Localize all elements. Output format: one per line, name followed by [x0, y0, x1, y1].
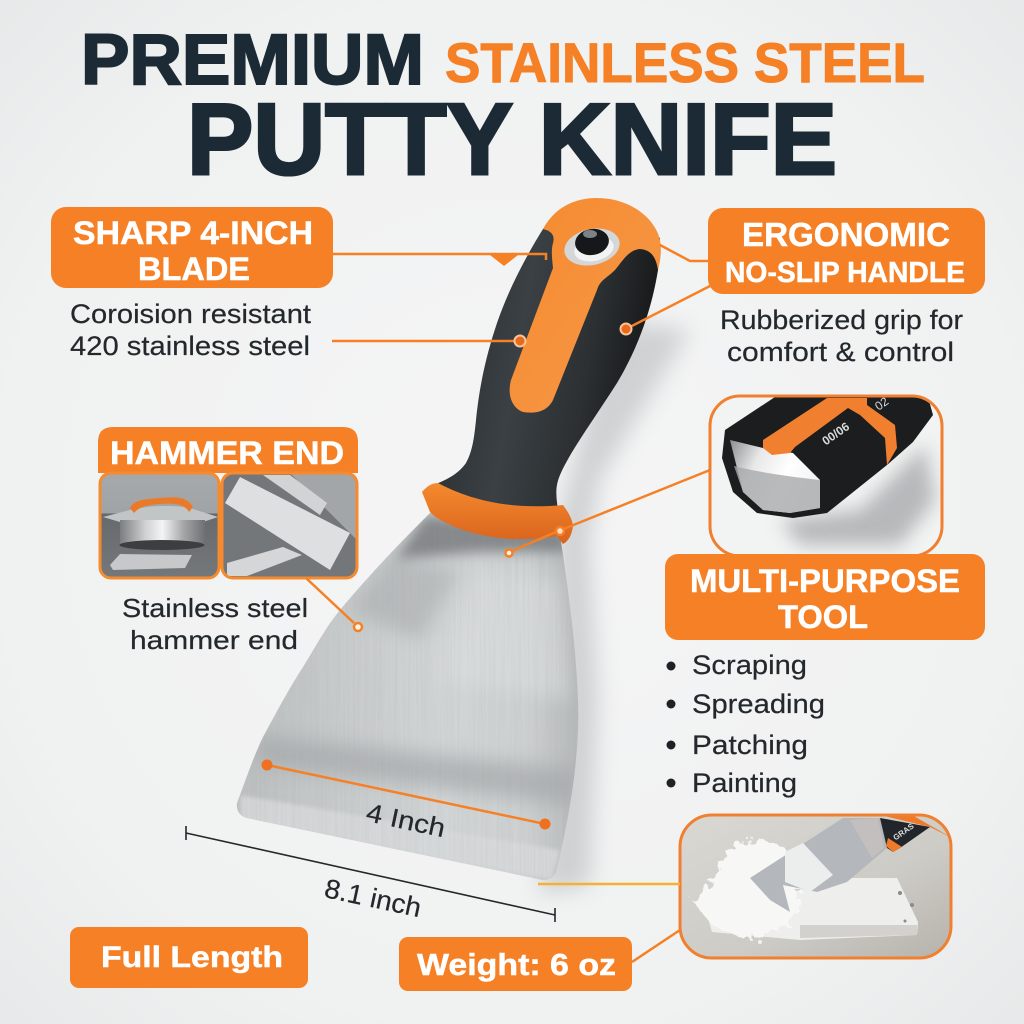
- photo: spreading plaster: GRAS: [892, 821, 916, 842]
- text: blade material: [70, 299, 312, 361]
- callout: sharp blade: [51, 207, 333, 288]
- photo: hammer end plates: [222, 473, 357, 578]
- heading: hammer end: [98, 427, 358, 473]
- callout: multi-purpose tool: [665, 554, 985, 640]
- title: PREMIUM: [81, 21, 424, 100]
- text: blade material: 420 stainless steel: [70, 331, 310, 361]
- photo: hammer end close-up: 00/06: [819, 419, 852, 448]
- handle orange grip: [510, 198, 661, 413]
- photo: spreading plaster: [680, 815, 952, 958]
- badge: full length: [70, 927, 308, 988]
- text: hammer end description: hammer end: [130, 625, 298, 655]
- heading: hammer end: HAMMER END: [110, 435, 344, 471]
- list: uses: [666, 650, 825, 798]
- text: hammer end description: [122, 593, 308, 655]
- panel: hammer end: [98, 427, 358, 578]
- knife shadow: [540, 320, 690, 895]
- connectors: handle callout: [620, 245, 710, 334]
- connectors: collar to close-up: [506, 470, 710, 556]
- callout: sharp blade: SHARP 4-INCH: [73, 215, 313, 251]
- callout: ergonomic handle: [708, 208, 985, 294]
- list: uses: Painting: [692, 768, 797, 798]
- callout: sharp blade: BLADE: [138, 251, 250, 287]
- badge: weight: [399, 937, 632, 991]
- callout: ergonomic handle: ERGONOMIC: [742, 216, 950, 253]
- putty knife illustration: [230, 198, 690, 895]
- blade: [230, 505, 585, 890]
- text: handle description: comfort & control: [727, 337, 954, 367]
- collar: [422, 483, 573, 544]
- text: handle description: Rubberized grip for: [720, 305, 963, 335]
- list: uses: Spreading: [692, 689, 825, 719]
- dimension: blade width: [262, 760, 550, 843]
- connectors: blade callout: [332, 254, 546, 346]
- title: STAINLESS STEEL: [445, 31, 925, 94]
- connector: plaster photo: [538, 884, 680, 962]
- callout: multi-purpose tool: TOOL: [778, 599, 868, 635]
- list: uses: Patching: [692, 730, 808, 760]
- photo: hammer end pot: [100, 473, 219, 578]
- text: handle description: [720, 305, 963, 367]
- end screw: [561, 224, 623, 270]
- handle body: [436, 205, 660, 530]
- list: uses: Scraping: [692, 650, 807, 680]
- badge: weight: Weight: 6 oz: [417, 947, 616, 982]
- callout: multi-purpose tool: MULTI-PURPOSE: [690, 563, 960, 599]
- callout: ergonomic handle: NO-SLIP HANDLE: [725, 257, 965, 289]
- photo: hammer end close-up: 02: [872, 394, 891, 413]
- text: blade material: Coroision resistant: [70, 299, 312, 329]
- dimension: full length: 8.1 inch: [322, 873, 424, 923]
- dimension: full length: [186, 826, 555, 923]
- connector: hammer end: [306, 578, 362, 631]
- dimension: blade width: 4 Inch: [364, 797, 448, 843]
- title: PUTTY KNIFE: [187, 84, 837, 196]
- badge: full length: Full Length: [101, 941, 283, 974]
- title: [81, 21, 925, 196]
- text: hammer end description: Stainless steel: [122, 593, 308, 623]
- photo: hammer end close-up: [710, 394, 942, 556]
